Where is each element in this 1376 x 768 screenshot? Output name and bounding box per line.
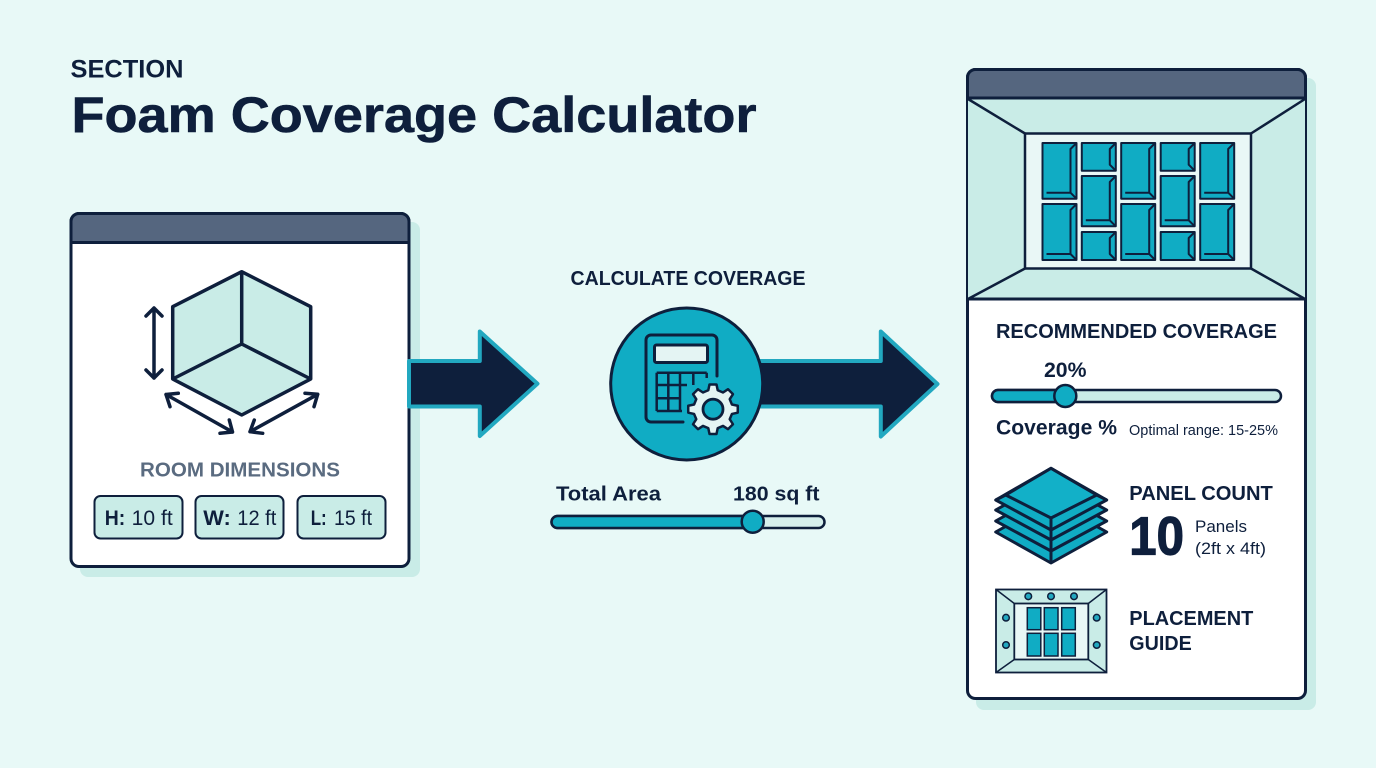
placement guide label: PLACEMENT [1129, 607, 1254, 630]
chip: length: L: [311, 507, 327, 530]
arrow: calculation to recommendation [750, 332, 938, 436]
placement guide label [1129, 607, 1254, 655]
foam panel grid [1042, 143, 1234, 260]
chip: height: 10 ft [132, 507, 173, 530]
panel count heading: PANEL COUNT [1129, 483, 1273, 505]
panel: calculate coverage [552, 268, 824, 533]
coverage slider [992, 385, 1281, 407]
recommended coverage heading: RECOMMENDED COVERAGE [996, 321, 1277, 343]
icon: calculator with gear [611, 308, 763, 460]
total area slider [552, 511, 824, 533]
coverage label: Coverage % [996, 416, 1117, 440]
panel count value: 10 [1129, 506, 1184, 566]
chip: width: W: [203, 507, 231, 530]
room illustration with foam panels [967, 98, 1306, 299]
title: Foam Coverage Calculator [72, 87, 756, 143]
icon: height arrow [146, 308, 162, 378]
calculate heading: CALCULATE COVERAGE [570, 268, 806, 290]
card shadow [976, 78, 1316, 710]
card body [71, 214, 409, 566]
room dimensions heading: ROOM DIMENSIONS [140, 460, 340, 482]
section label: SECTION [70, 55, 184, 83]
chip: length [298, 496, 386, 538]
icon: length arrow [166, 393, 232, 433]
chip: height: H: [105, 507, 125, 530]
coverage value: 20% [1044, 359, 1087, 382]
placement guide label: GUIDE [1129, 632, 1192, 655]
optimal range note: Optimal range: 15-25% [1129, 423, 1278, 439]
panel: recommended coverage [967, 70, 1316, 710]
chip: length: 15 ft [334, 507, 372, 530]
icon: width arrow [250, 393, 318, 433]
panel count unit: Panels [1195, 517, 1247, 536]
chip: width: 12 ft [237, 507, 276, 530]
total area value: 180 sq ft [733, 483, 820, 506]
icon: room cube [173, 272, 311, 415]
total area label: Total Area [556, 483, 662, 506]
arrow: dimensions to calculation [409, 332, 538, 436]
chip: width [196, 496, 284, 538]
panel: room dimensions [71, 214, 420, 577]
card shadow [80, 222, 420, 577]
card header bar [71, 214, 409, 242]
card header bar [968, 70, 1306, 98]
panel size: (2ft x 4ft) [1195, 539, 1266, 558]
icon: stacked foam panels [996, 468, 1107, 563]
card body [968, 70, 1306, 698]
chip: height [94, 496, 182, 538]
icon: placement guide [996, 590, 1106, 672]
